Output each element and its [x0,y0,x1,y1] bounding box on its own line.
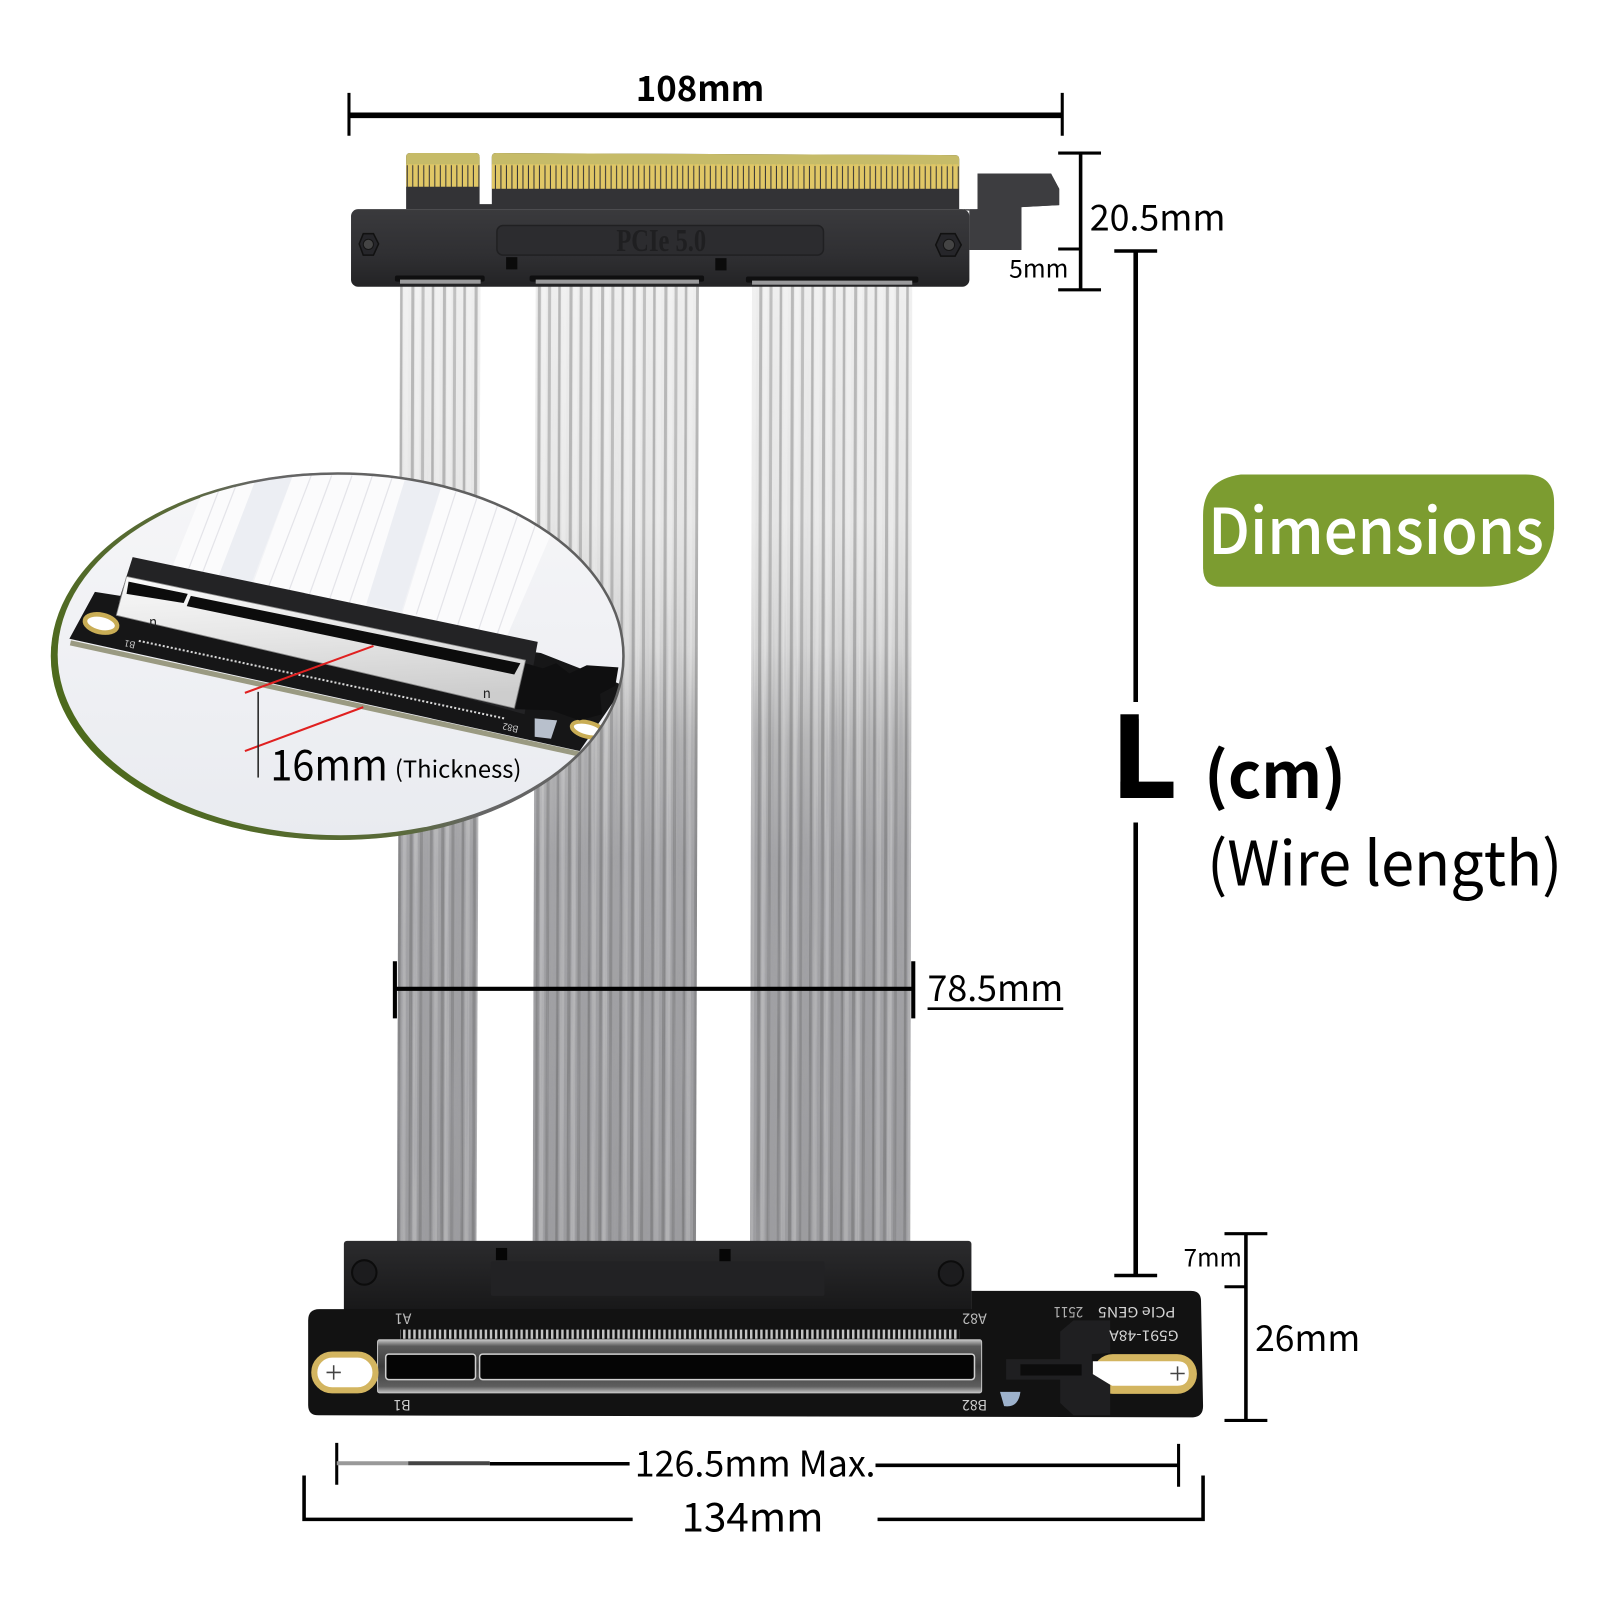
ribbon entry notches [395,276,918,283]
bottom slot board [308,1241,1203,1417]
dimension: 108mm: 108mm [636,61,764,111]
black circuit board [308,1291,1203,1417]
logo mark [1000,1392,1020,1406]
red measure line upper [245,646,373,693]
dimension: 134mm: 134mm [682,1487,823,1544]
ribbon wire lines [397,276,912,1245]
ribbon 2 [533,276,699,1245]
inset green crescent [51,472,624,840]
dimension: 134mm [304,1476,1203,1544]
dimension: 108mm [349,61,1062,136]
dimension: 7mm and 26mm [1184,1234,1360,1420]
ribbon 1 [397,276,481,1245]
board silk text: 2511 [1054,1302,1083,1323]
dimension: 126.5mm Max [337,1437,1179,1488]
housing label plate [497,226,823,255]
inset pcb marks: B82 [501,720,520,737]
metal slot frame [378,1340,982,1393]
gold band left [406,153,480,165]
board silk text: B82 [962,1395,987,1416]
dimension: L wire length line [1114,251,1157,1276]
inset shield marks [150,619,490,698]
dimension: 78.5mm: 78.5mm [928,961,1063,1012]
inset pcb marks: B1 [123,637,137,653]
connector housing [351,209,969,287]
latch [1006,1320,1110,1415]
dimension: 20.5mm and 5mm: 20.5mm [1090,191,1226,242]
PCIe 5.0 embossed label: PCIe 5.0 [616,223,706,258]
(cm) label: (cm) [1204,726,1346,817]
board silk text: B1 [393,1395,411,1416]
inset latch [515,663,618,720]
dimension: 7mm and 26mm: 26mm [1255,1311,1360,1362]
dimension: 20.5mm and 5mm: 5mm [1009,251,1068,286]
inset board edge [70,643,580,754]
Thickness label: (Thickness) [395,751,521,785]
board silk text: PCIe GEN5 [1098,1302,1176,1323]
inset background [58,474,624,835]
pad row [400,1330,959,1339]
inset outline [52,473,623,839]
housing plate lower [491,1261,824,1296]
ribbon ends at housing [400,280,912,285]
inset circuit board [69,592,624,751]
gold band right [492,153,959,166]
board silk text: G591-48A [1109,1326,1179,1347]
gold fingers left [406,164,480,187]
ribbon 3 [750,276,912,1245]
dimension: 20.5mm and 5mm [1009,153,1226,290]
board silk text [393,1302,1179,1416]
inset ribbons [173,482,540,635]
plus marks [327,1365,1185,1381]
red measure line lower [245,707,363,751]
board silk text: A82 [962,1308,987,1329]
inset ribbon wire lines [186,476,539,638]
inset logo mark [535,718,557,739]
inset ribbon gaps [236,478,441,530]
inset housing [118,557,538,714]
inset long slot [187,596,520,674]
inset clipped photo [69,476,624,754]
slot between fingers [480,151,491,202]
screw right [936,234,961,256]
connector circuit board [406,153,1059,250]
small squares lower [496,1248,731,1261]
16mm label: 16mm [270,732,388,794]
Dimensions badge: Dimensions [1208,482,1544,573]
inset contact dots [139,641,504,718]
L label: L [1120,695,1173,823]
ribbon cables [397,276,912,1245]
inset: thickness detail [51,472,624,840]
notch by bracket [960,151,977,209]
screws lower [352,1260,963,1286]
dimension: 7mm and 26mm: 7mm [1184,1239,1242,1274]
gold fingers right [492,164,959,189]
inset gold ring left [83,612,119,635]
connector housing lower [344,1241,971,1314]
thickness leader [257,692,259,778]
small slot opening [386,1354,476,1380]
inset gold ring right [570,720,600,740]
inset shield marks: n [149,612,157,631]
small square marks [506,257,727,270]
latch inner dark [1020,1364,1082,1376]
inset small slot [127,582,188,603]
inset shield marks: n [483,683,491,702]
board silk text: A1 [395,1308,411,1329]
top edge connector [351,151,1059,287]
dimension: 126.5mm Max: 126.5mm Max. [635,1437,876,1488]
long slot opening [480,1354,974,1380]
dimension: 78.5mm [395,961,1063,1018]
right mount hole [1093,1354,1197,1394]
screw left [359,234,379,255]
inset silver shield [116,577,526,708]
bracket [969,173,1059,250]
brushed ribbon texture [397,622,911,1241]
inset pcb marks [123,637,520,737]
(Wire length) label: (Wire length) [1207,815,1562,904]
left mount hole [314,1355,376,1390]
